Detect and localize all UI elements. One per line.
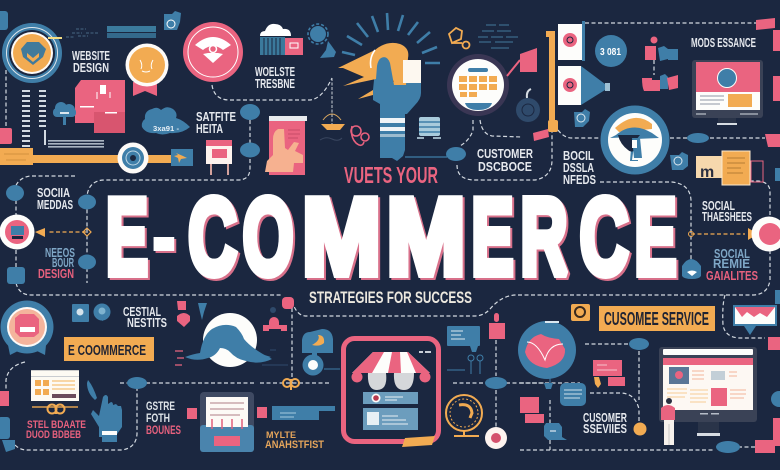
right edge pink tags bbox=[533, 18, 780, 453]
icon: blue fish bbox=[258, 350, 288, 365]
text: pink caption bbox=[26, 419, 86, 441]
icon: orange coin bbox=[634, 422, 646, 436]
main title: E-COMMERCE: E bbox=[106, 175, 148, 297]
icon: raised fist lightbulb bbox=[338, 13, 447, 161]
blue ribbon bar bbox=[272, 406, 335, 420]
text: store forth bonuses bbox=[146, 401, 181, 437]
main title: E-COMMERCE: E bbox=[471, 175, 514, 297]
icon: envelope bubble bbox=[733, 290, 780, 350]
node: right edge oval bbox=[771, 391, 780, 407]
left edge tags bbox=[0, 391, 15, 452]
text: website treasure: TRESBNE bbox=[255, 77, 295, 91]
text: needs your design: NEEOS bbox=[45, 246, 75, 260]
icon: white disc bbox=[485, 427, 507, 449]
text: social gallery bbox=[706, 247, 758, 283]
text: needs your design: DESIGN bbox=[38, 267, 74, 281]
icon: balance scale bbox=[320, 78, 345, 140]
label: customer service: CUSOMEE SERVICE bbox=[604, 309, 709, 329]
text: store forth bonuses: FOTH bbox=[146, 413, 170, 425]
text: website treasure bbox=[255, 65, 295, 91]
text: social display needs: BOCIL bbox=[563, 149, 594, 163]
orange column bbox=[546, 31, 558, 132]
icon: medal bbox=[126, 44, 168, 96]
text: customer discount: CUSTOMER bbox=[477, 147, 533, 161]
icon: pink squiggle bbox=[351, 126, 369, 145]
text: social display needs bbox=[563, 149, 596, 187]
left node cluster bbox=[0, 185, 96, 284]
icon: document cards bbox=[696, 151, 763, 185]
icon: cog and wrench bbox=[308, 24, 336, 58]
main title: E-COMMERCE: C bbox=[188, 177, 237, 298]
icon: blue pointing hand bbox=[87, 380, 122, 442]
text: social media: MEDDAS bbox=[37, 198, 73, 212]
heading: vuets your: VUETS YOUR bbox=[344, 162, 438, 188]
icon: blue cloud with text: 3xa91 - bbox=[153, 126, 180, 133]
text: pink caption: DUOD BDBEB bbox=[26, 429, 81, 441]
text: digital assets: NESTITS bbox=[127, 316, 167, 330]
pink note cards bbox=[520, 360, 625, 423]
text: social thresholds: THAESHEES bbox=[702, 210, 752, 224]
icon: pink node dot bbox=[282, 297, 294, 309]
icon: top-left badges bbox=[0, 11, 181, 30]
node: oval bbox=[446, 147, 466, 161]
text: social media: SOCIIA bbox=[37, 186, 70, 200]
icon: pink figure bbox=[177, 301, 207, 327]
icon: pink-blue heart circle bbox=[518, 321, 576, 389]
text: digital assets: CESTIAL bbox=[123, 305, 161, 319]
main title: E-COMMERCE: M bbox=[386, 176, 466, 297]
main title: E-COMMERCE: - bbox=[151, 174, 177, 296]
node: oval bbox=[687, 133, 709, 143]
icon: people flags bbox=[642, 36, 678, 91]
text: site media bbox=[196, 110, 236, 136]
orange bar with dial bbox=[0, 142, 193, 174]
icon: orange wheel bbox=[446, 395, 482, 436]
node: oval with pink tag bbox=[485, 313, 507, 389]
icon: small blue badges bbox=[574, 109, 780, 181]
icon: pink stamp bbox=[263, 317, 287, 331]
blue text brick pattern bbox=[478, 24, 518, 49]
text: social display needs: NFEDS bbox=[563, 173, 596, 187]
label: e-commerce bbox=[64, 337, 154, 361]
text: customer services bbox=[583, 411, 627, 436]
text: store forth bonuses: BOUNES bbox=[146, 425, 181, 437]
icon: small cloud tree bbox=[53, 102, 76, 125]
main title: E-COMMERCE: O bbox=[243, 177, 293, 298]
main title: E-COMMERCE: M bbox=[302, 176, 381, 297]
text: site media: HEITA bbox=[196, 122, 223, 136]
icon: small pink tag bbox=[0, 128, 12, 144]
icon: pink boxes bbox=[75, 80, 125, 133]
text: customer discount: DSCBOCE bbox=[478, 160, 532, 174]
awning bbox=[352, 352, 430, 390]
icon: moon and cloud bbox=[175, 307, 276, 367]
node: oval bbox=[127, 377, 147, 389]
text: social display needs: DSSLA bbox=[563, 161, 594, 175]
text: site media: SATFITE bbox=[196, 110, 236, 124]
icon: funnel panels bbox=[558, 21, 610, 105]
icon: pink circle bbox=[183, 22, 243, 82]
text: pink caption: STEL BDAATE bbox=[27, 419, 86, 431]
icon: blue stat circle: 3 081 bbox=[600, 47, 621, 58]
label: e-commerce: E COOMMERCE bbox=[68, 342, 146, 359]
text: website design bbox=[72, 49, 110, 75]
icon: pin marker bbox=[0, 300, 54, 355]
text: website design: DESIGN bbox=[73, 61, 109, 75]
text: customer services: SSEVIIES bbox=[583, 422, 627, 436]
subtitle: STRATEGIES FOR SUCCESS bbox=[309, 288, 472, 307]
icon: magnifier with product grid bbox=[447, 54, 520, 116]
text: store forth bonuses: GSTRE bbox=[146, 401, 175, 413]
text: needs your design: BOUR bbox=[52, 256, 74, 270]
text: digital assets bbox=[123, 305, 167, 330]
icon: browser window bbox=[31, 370, 79, 414]
icon: cloud store bbox=[260, 24, 303, 55]
text: needs your design bbox=[38, 246, 75, 281]
text: social gallery: GAIALITES bbox=[706, 269, 758, 283]
icon: blue cloud with text bbox=[142, 107, 190, 134]
text: website treasure: WOELSTE bbox=[255, 65, 295, 79]
icon: small blue items bbox=[72, 304, 110, 322]
main title: E-COMMERCE bbox=[106, 174, 677, 298]
icon: orange loop bbox=[283, 379, 299, 390]
icon: monitor bbox=[692, 60, 763, 125]
icon: blue bubble bbox=[544, 423, 567, 440]
text: social thresholds: SOCIAL bbox=[702, 199, 735, 213]
dot grid bbox=[22, 90, 104, 148]
text: social thresholds bbox=[702, 199, 752, 224]
icon: orange tools bbox=[449, 28, 470, 48]
text: customer discount bbox=[477, 147, 533, 174]
icon: document cards: m bbox=[700, 164, 714, 181]
person bbox=[661, 398, 675, 445]
icon: blue rounded card bbox=[560, 383, 586, 406]
info bars bbox=[363, 392, 418, 430]
main title: E-COMMERCE: C bbox=[580, 177, 628, 298]
panel: storefront bbox=[344, 338, 438, 447]
main title: E-COMMERCE: E bbox=[634, 175, 677, 297]
icon: orange badge bbox=[571, 304, 590, 321]
icon: blue speech card bbox=[447, 326, 483, 374]
node: bottom-right oval bbox=[716, 441, 740, 453]
label: customer service bbox=[599, 306, 715, 331]
icon: gear hook bbox=[516, 89, 540, 122]
text: orange caption: MYLTE bbox=[266, 430, 296, 441]
icon: server stack bbox=[417, 117, 441, 138]
text: social media bbox=[37, 186, 73, 212]
text: orange caption: ANAHSTFIST bbox=[265, 439, 324, 451]
text: social gallery: SOCIAL bbox=[714, 247, 750, 261]
icon: stand bbox=[206, 140, 232, 175]
text: customer services: CUSOMER bbox=[583, 411, 627, 425]
icon: pink flag bbox=[520, 48, 537, 72]
icon: large monitor with person bbox=[659, 347, 757, 445]
icon: blue figure with disc bbox=[302, 329, 340, 376]
text: website design: WEBSITE bbox=[72, 49, 110, 63]
node: oval bbox=[629, 338, 649, 350]
icon: blue stat circle bbox=[595, 35, 627, 67]
icon: large circle figure bbox=[600, 106, 670, 174]
main title: E-COMMERCE: R bbox=[520, 177, 568, 298]
icon: website design circle bbox=[2, 23, 98, 83]
icon: tablet with hand bbox=[265, 116, 307, 175]
text: orange caption bbox=[265, 430, 324, 451]
icon: tablet document bbox=[187, 392, 267, 452]
right node cluster bbox=[682, 216, 780, 279]
icon: bars bbox=[107, 26, 156, 38]
text: social gallery: REMIE bbox=[713, 257, 750, 271]
nodes: upper left connector bbox=[240, 104, 260, 158]
